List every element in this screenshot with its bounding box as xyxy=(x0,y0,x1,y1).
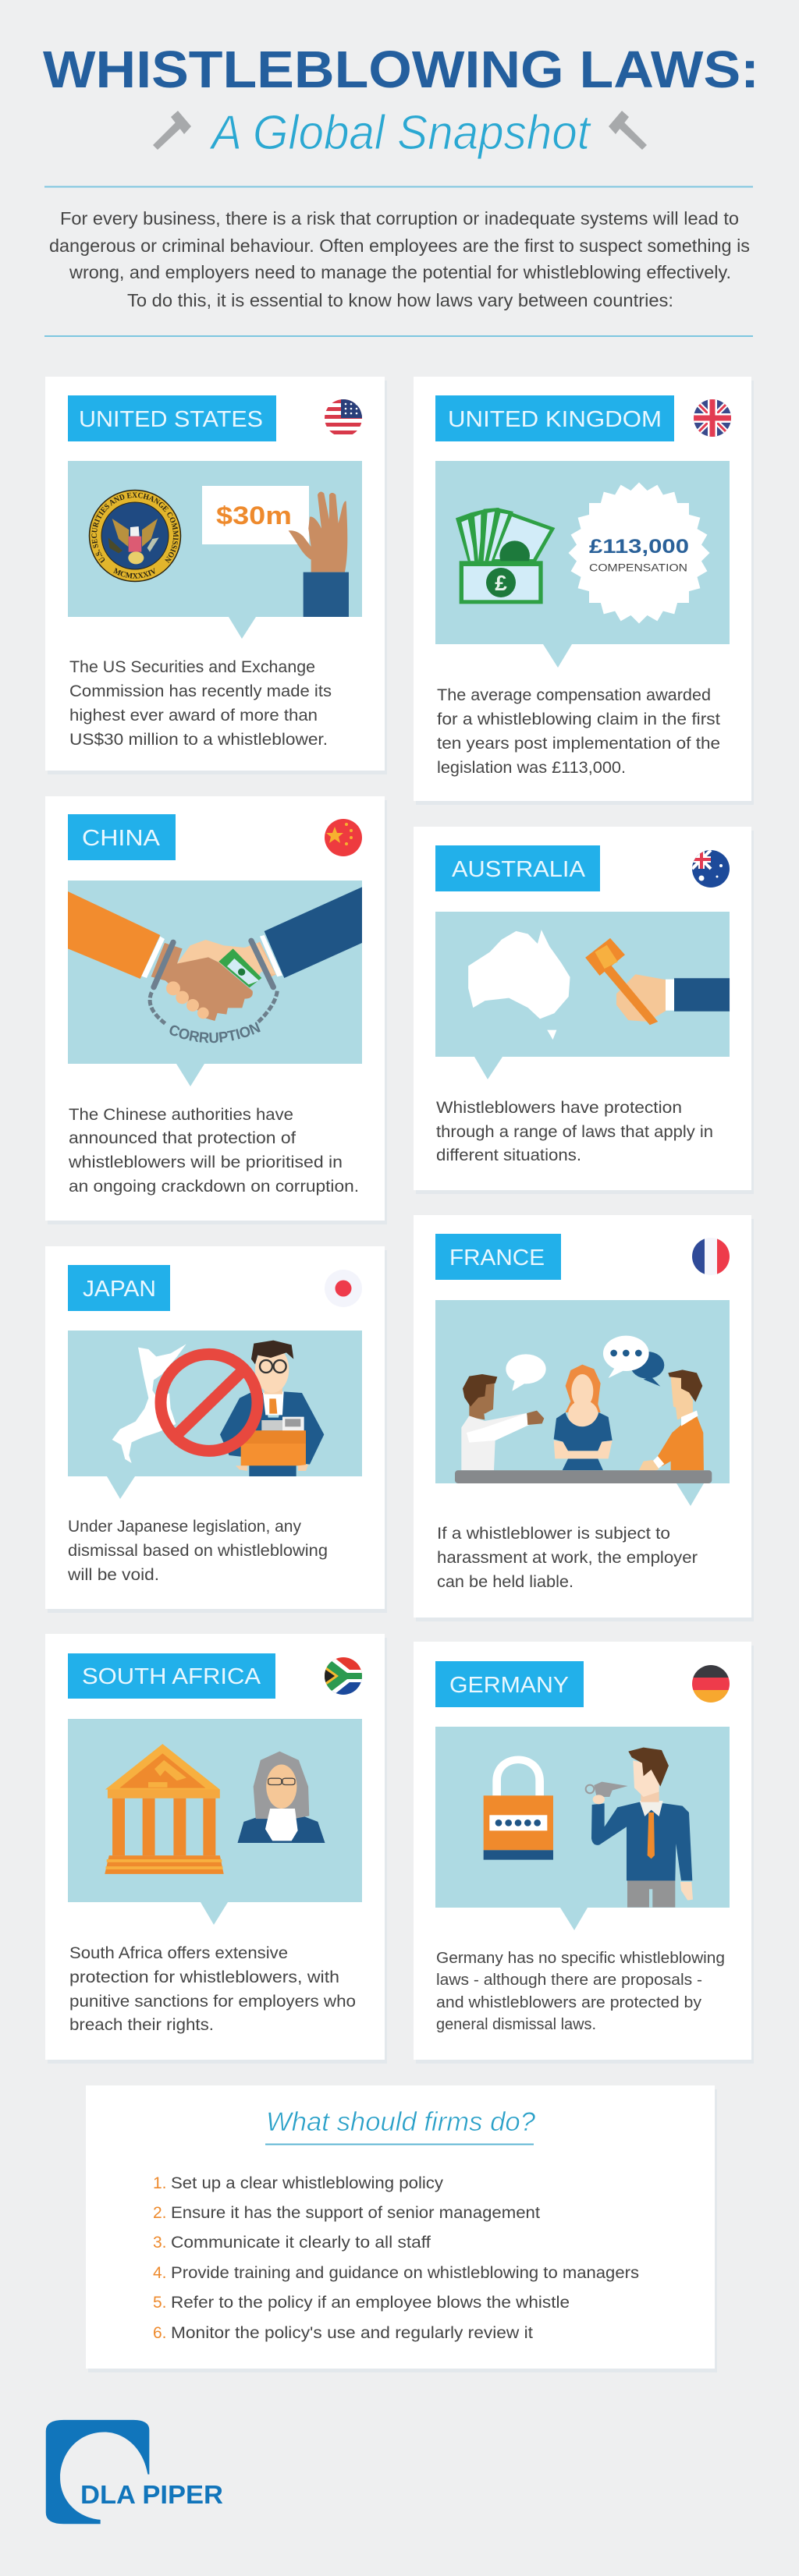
body text: United States: Commission has recently made its xyxy=(69,682,332,700)
body text: Australia: different situations. xyxy=(436,1146,581,1164)
body text: Germany: Germany has no specific whistleblowing xyxy=(436,1950,725,1967)
numbered list: Provide training and guidance on whistleblowing to managers xyxy=(171,2264,639,2282)
icon: France flag xyxy=(692,1238,730,1275)
icon: hand and sleeve xyxy=(289,492,349,617)
icon: Japan map xyxy=(112,1344,186,1463)
amount label: £113,000 xyxy=(589,536,689,558)
body text: South Africa: punitive sanctions for employers who xyxy=(69,1993,356,2011)
body text: United States: US$30 million to a whistleblower. xyxy=(69,731,328,749)
intro text: dangerous or criminal behaviour. Often employees are the first to suspect something is xyxy=(49,236,750,256)
figure: man with whistle xyxy=(586,1748,693,1908)
heading: Australia: AUSTRALIA xyxy=(452,857,586,882)
icon: Japan flag xyxy=(325,1270,362,1307)
panel: What should firms do xyxy=(86,2085,717,2372)
body text: South Africa: South Africa offers extensive xyxy=(69,1944,288,1962)
label: corruption: CORRUPTION xyxy=(170,1022,261,1044)
heading: What should firms do: What should firms do? xyxy=(266,2107,535,2137)
icon: judge xyxy=(237,1752,325,1843)
note: $30m: $30m xyxy=(216,501,292,530)
heading: France: FRANCE xyxy=(449,1245,545,1270)
body text: United Kingdom: for a whistleblowing claim in the first xyxy=(437,710,720,728)
body text: United States: highest ever award of more than xyxy=(69,707,318,725)
numbered list: Monitor the policy's use and regularly review it xyxy=(171,2324,533,2342)
icon: South Africa flag xyxy=(325,1657,362,1695)
intro text: For every business, there is a risk that corruption or inadequate systems will lead to xyxy=(60,208,739,229)
intro text: wrong, and employers need to manage the potential for whistleblowing effectively. xyxy=(69,262,731,282)
icon: hand with gavel xyxy=(585,938,730,1025)
body text: France: can be held liable. xyxy=(437,1573,574,1591)
heading: Australia xyxy=(435,845,600,891)
body text: China: an ongoing crackdown on corruption. xyxy=(69,1178,359,1196)
logo: DLA Piper: DLA PIPER xyxy=(80,2480,223,2509)
body text: Australia: Whistleblowers have protection xyxy=(436,1099,682,1117)
body text: South Africa xyxy=(69,1944,356,2034)
heading: South Africa: SOUTH AFRICA xyxy=(82,1664,261,1689)
icon: padlock xyxy=(484,1756,553,1860)
body text: Germany: laws - although there are proposals - xyxy=(436,1972,702,1989)
illustration: corrupt handshake xyxy=(68,881,362,1086)
body text: United States: The US Securities and Exchange xyxy=(69,658,315,676)
body text: Japan: will be void. xyxy=(67,1566,159,1584)
panel: Germany xyxy=(414,1642,754,2064)
illustration: Australia and gavel xyxy=(435,912,730,1079)
figure: left man xyxy=(461,1374,544,1470)
numbered list: Refer to the policy if an employee blows the whistle xyxy=(171,2294,570,2312)
numbered list: Set up a clear whistleblowing policy xyxy=(171,2174,444,2192)
body text: France: harassment at work, the employer xyxy=(437,1549,698,1567)
body text: China: announced that protection of xyxy=(69,1129,296,1147)
icon: banknotes: £ xyxy=(495,571,507,595)
body text: United Kingdom: legislation was £113,000. xyxy=(437,759,626,777)
heading: South Africa xyxy=(68,1653,275,1699)
title: WHISTLEBLOWING LAWS: xyxy=(43,41,759,99)
icon: left gavel xyxy=(153,111,191,150)
body text: Australia xyxy=(436,1099,713,1164)
intro text: To do this, it is essential to know how laws vary between countries: xyxy=(127,290,673,310)
subtitle: A Global Snapshot xyxy=(208,106,592,160)
numbered list: 6. xyxy=(153,2324,167,2342)
icon: right gavel xyxy=(609,111,647,150)
numbered list: 2. xyxy=(153,2204,167,2222)
numbered list: 5. xyxy=(153,2294,167,2312)
body text: United Kingdom xyxy=(437,686,720,777)
heading: Japan xyxy=(68,1265,170,1311)
panel: United States xyxy=(45,377,387,774)
panel: Australia xyxy=(414,827,754,1194)
body text: China: whistleblowers will be prioritised in xyxy=(68,1153,343,1171)
icon: handshake with handcuffs xyxy=(68,887,362,1025)
body text: Germany xyxy=(436,1950,725,2033)
figure: right man xyxy=(638,1369,704,1476)
illustration: compensation xyxy=(435,461,730,668)
figure: woman xyxy=(554,1365,613,1470)
panel: Japan xyxy=(45,1246,387,1613)
body text: Germany: and whistleblowers are protected by xyxy=(436,1994,701,2011)
body text: Germany: general dismissal laws. xyxy=(436,2016,596,2033)
illustration: dismissal prohibited xyxy=(68,1331,362,1499)
body text: South Africa: breach their rights. xyxy=(69,2016,214,2034)
body text: Australia: through a range of laws that apply in xyxy=(436,1123,713,1141)
icon: China flag xyxy=(325,819,362,856)
icon: banknotes xyxy=(456,508,552,604)
icon: starburst xyxy=(568,482,710,624)
body text: United Kingdom: The average compensation awarded xyxy=(437,686,711,704)
amount label: COMPENSATION xyxy=(589,562,687,574)
icon: US flag xyxy=(325,399,362,437)
numbered list xyxy=(153,2174,639,2342)
illustration: workplace conversation xyxy=(435,1300,730,1506)
heading: United States: UNITED STATES xyxy=(79,407,263,432)
body text: United States xyxy=(69,658,332,749)
body text: Japan: dismissal based on whistleblowing xyxy=(68,1542,328,1560)
icon: speech bubbles xyxy=(506,1336,664,1391)
numbered list: Communicate it clearly to all staff xyxy=(171,2234,431,2252)
icon: prohibition sign xyxy=(161,1354,257,1451)
body text: Japan: Under Japanese legislation, any xyxy=(68,1518,301,1536)
heading: United States xyxy=(68,395,276,441)
icon: Germany flag xyxy=(692,1665,730,1703)
heading: Japan: JAPAN xyxy=(83,1277,156,1302)
note: $30m xyxy=(202,486,309,544)
body text: Japan xyxy=(67,1518,328,1584)
heading: Germany: GERMANY xyxy=(449,1673,569,1698)
icon: Australia flag xyxy=(692,850,730,888)
heading: United Kingdom: UNITED KINGDOM xyxy=(448,407,662,432)
icon: courthouse xyxy=(105,1744,224,1874)
numbered list: 1. xyxy=(153,2174,167,2192)
body text: France: If a whistleblower is subject to xyxy=(437,1525,670,1543)
logo: DLA Piper xyxy=(46,2420,223,2524)
body text: China: The Chinese authorities have xyxy=(69,1106,293,1124)
table xyxy=(455,1470,712,1483)
heading: China: CHINA xyxy=(82,826,161,851)
numbered list: 3. xyxy=(153,2234,167,2252)
icon: UK flag xyxy=(694,399,731,437)
panel: France xyxy=(414,1215,754,1621)
body text: South Africa: protection for whistleblowers, with xyxy=(69,1968,339,1986)
heading: France xyxy=(435,1234,561,1280)
body text: United Kingdom: ten years post implementation of the xyxy=(437,735,720,753)
heading: United Kingdom xyxy=(435,395,674,441)
figure: man with box xyxy=(220,1341,324,1476)
panel: China xyxy=(45,796,387,1224)
icon: Australia map xyxy=(468,930,570,1040)
numbered list: Ensure it has the support of senior management xyxy=(171,2204,540,2222)
illustration: SEC award xyxy=(68,461,362,639)
icon: SEC seal: U.S. SECURITIES AND EXCHANGE COMMISSION xyxy=(91,492,179,563)
panel: South Africa xyxy=(45,1634,387,2064)
amount label xyxy=(589,536,689,574)
numbered list: 4. xyxy=(153,2264,167,2282)
heading: Germany xyxy=(435,1661,584,1707)
icon: SEC seal: MCMXXXIV xyxy=(113,568,154,579)
heading: China xyxy=(68,814,176,860)
body text: China xyxy=(68,1106,359,1196)
body text: France xyxy=(437,1525,698,1591)
intro text xyxy=(49,208,750,310)
panel: United Kingdom xyxy=(414,377,754,805)
illustration: courthouse and judge xyxy=(68,1719,362,1925)
illustration: lock and whistle xyxy=(435,1727,730,1930)
